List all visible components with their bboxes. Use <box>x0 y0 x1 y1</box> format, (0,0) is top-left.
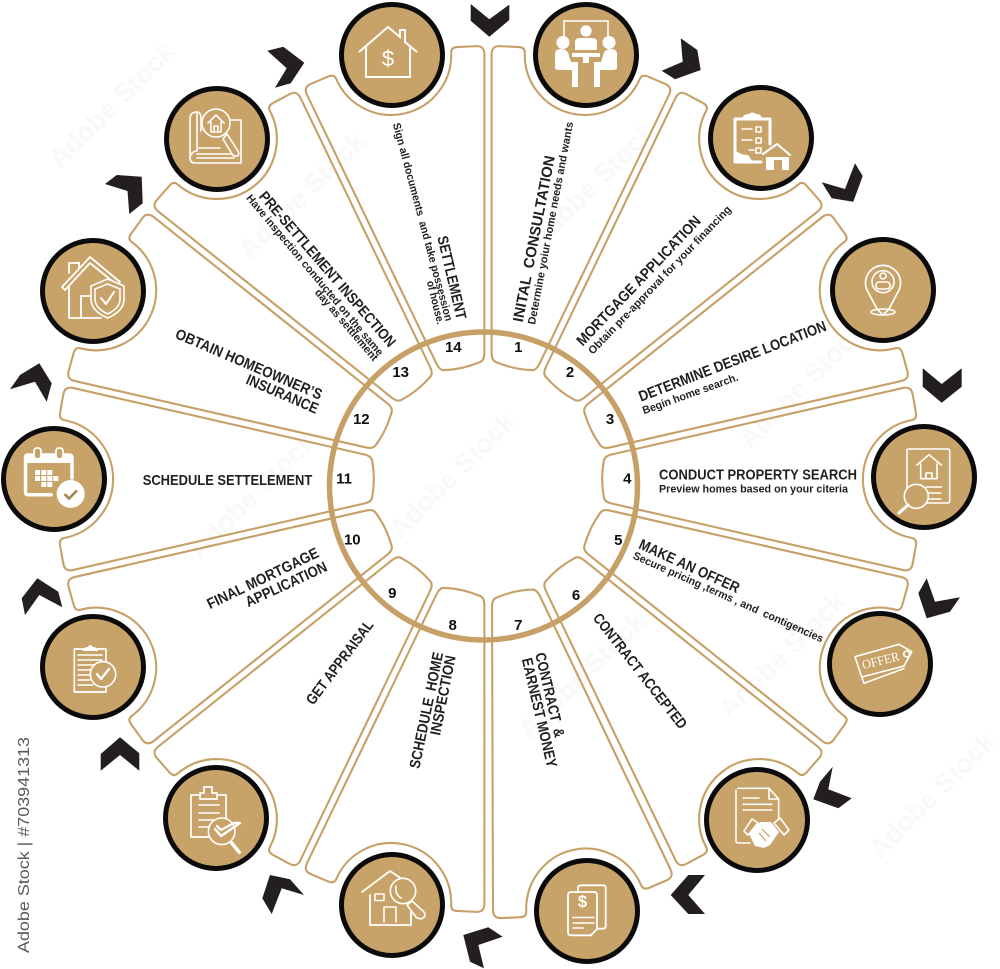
icon: calendar with check <box>4 428 104 530</box>
number 5: 5 <box>614 532 622 549</box>
segment outline 6 <box>488 511 826 871</box>
arrow after step 14 <box>471 4 509 37</box>
segment outline 7 <box>425 572 674 923</box>
heading 13: PRE-SETTLEMENT INSPECTION <box>255 188 399 351</box>
segment outline 5 <box>551 446 913 747</box>
stock watermark: Adobe Stock <box>513 606 652 744</box>
description 5: Secure pricing ,terms , and contigencies <box>631 550 825 645</box>
icon: house with shield <box>42 240 144 342</box>
stock watermark: Adobe Stock <box>733 316 872 454</box>
panel: step 6 contract accepted <box>488 511 826 914</box>
description 13 line 1: Have inspection conducted on the same <box>243 193 385 358</box>
icon: location pin with person <box>832 240 934 340</box>
description 1: Determine yoiur home needs and wants <box>526 121 576 326</box>
arrow after step 3 <box>923 368 962 403</box>
arrow after step 10 <box>22 578 62 615</box>
icon: offer tag <box>830 614 930 714</box>
heading 2: MORTGAGE APPLICATION <box>573 213 705 349</box>
panel: step 14 settlement <box>304 4 552 388</box>
panel: step 12 homeowner's insurance <box>42 175 425 512</box>
icon: blueprint and magnifier <box>166 88 268 190</box>
number 4: 4 <box>623 470 632 488</box>
stock watermark: Adobe Stock <box>523 116 662 254</box>
number 12: 12 <box>353 411 370 428</box>
icon: house with dollar sign: $ <box>382 46 394 71</box>
stock watermark: Adobe Stock <box>383 406 522 544</box>
number 3: 3 <box>606 411 614 428</box>
arrow after step 7 <box>463 927 503 968</box>
segment outline 9 <box>150 511 488 871</box>
panel: step 8 home inspection <box>262 570 552 956</box>
panel: step 9 get appraisal <box>101 511 488 871</box>
arrow after step 13 <box>267 47 304 88</box>
panel: step 5 make an offer <box>551 446 930 808</box>
arrow after step 12 <box>105 175 143 214</box>
heading 10 line 1: FINAL MORTGAGE <box>204 545 322 613</box>
panel: step 11 schedule settlement <box>4 363 374 570</box>
heading 5: MAKE AN OFFER <box>636 536 742 597</box>
segment outline 10 <box>63 446 425 747</box>
panel: step 7 contract and earnest money <box>425 572 674 968</box>
description 14 line 2: of house. <box>424 280 446 326</box>
panel: step 1 initial consultation <box>424 4 701 388</box>
arrow after step 11 <box>10 363 52 402</box>
description 2: Obtain pre-approval for your financing <box>586 204 734 357</box>
segment outline 2 <box>488 87 826 447</box>
description 4: Preview homes based on your citeria <box>659 483 849 495</box>
segment outline 14 <box>304 41 552 388</box>
number 6: 6 <box>572 587 580 604</box>
segment outline 8 <box>304 570 552 917</box>
heading 7 line 2: EARNEST MONEY <box>518 656 560 769</box>
arrow after step 8 <box>262 875 304 914</box>
central ring <box>330 332 638 640</box>
panel: step 2 mortgage application <box>488 87 863 447</box>
number 9: 9 <box>388 585 396 602</box>
panel: step 4 property search <box>602 388 974 618</box>
heading 8 line 2: INSPECTION <box>427 654 460 737</box>
number 14: 14 <box>445 339 462 356</box>
icon: property document with magnifier <box>874 426 974 528</box>
heading 10 line 2: APPLICATION <box>243 559 330 611</box>
panel: step 10 final mortgage application <box>22 446 425 747</box>
icon: contract and handshake <box>706 770 808 870</box>
stock watermark: Adobe Stock <box>183 426 322 564</box>
heading 12 line 1: OBTAIN HOMEOWNER’S <box>173 326 325 404</box>
segment outline 13 <box>150 87 488 447</box>
panel: step 3 determine location <box>551 211 962 512</box>
arrow after step 6 <box>671 875 705 914</box>
segment outline 3 <box>551 211 913 512</box>
icon: house with dollar sign <box>342 4 442 106</box>
number 10: 10 <box>344 532 361 548</box>
heading 3: DETERMINE DESIRE LOCATION <box>636 318 829 405</box>
number 2: 2 <box>566 364 574 381</box>
icon: checklist and house <box>710 88 812 188</box>
stock watermark: Adobe Stock <box>863 726 1000 864</box>
heading 7 line 1: CONTRACT & <box>531 651 568 739</box>
icon: money documents <box>536 860 638 962</box>
panel: step 13 pre-settlement inspection <box>150 47 488 447</box>
segment outline 1 <box>424 41 672 388</box>
description 14 line 1: Sign all documents and take possession <box>390 122 454 323</box>
icon: clipboard with magnifier check <box>166 768 266 868</box>
stock watermark: Adobe Stock <box>43 36 182 174</box>
arrow after step 4 <box>918 578 960 618</box>
heading 14: SETTLEMENT <box>433 234 469 321</box>
heading 12 line 2: INSURANCE <box>243 371 321 418</box>
icon: offer tag: OFFER <box>860 648 901 672</box>
segment outline 4 <box>602 388 916 570</box>
heading 1: INITAL CONSULTATION <box>510 154 559 323</box>
number 7: 7 <box>514 617 522 634</box>
description 13 line 2: day as settlement <box>312 287 380 364</box>
arrow after step 2 <box>822 163 863 202</box>
description 3: Begin home search. <box>641 372 740 417</box>
heading 6: CONTRACT ACCEPTED <box>589 610 690 733</box>
arrow after step 5 <box>813 767 852 808</box>
number 8: 8 <box>449 617 457 634</box>
icon: house and magnifier <box>342 854 442 956</box>
number 11: 11 <box>336 470 352 488</box>
stock credit text: Adobe Stock | #703941313 <box>16 737 33 953</box>
icon: money documents: $ <box>578 892 588 911</box>
icon: meeting at a table <box>536 4 636 106</box>
heading 4: CONDUCT PROPERTY SEARCH <box>659 466 857 483</box>
stock watermark: Adobe Stock <box>233 126 372 264</box>
arrow after step 1 <box>662 38 701 79</box>
heading 11: SCHEDULE SETTELEMENT <box>143 472 312 489</box>
heading 9: GET APPRAISAL <box>303 617 377 708</box>
stock watermark: Adobe Stock <box>713 586 852 724</box>
arrow after step 9 <box>101 737 139 771</box>
number 13: 13 <box>392 364 409 381</box>
heading 8 line 1: SCHEDULE HOME <box>407 651 447 770</box>
number 1: 1 <box>514 339 522 356</box>
segment outline 11 <box>60 388 374 570</box>
icon: approved clipboard <box>42 616 144 718</box>
segment outline 12 <box>63 211 425 512</box>
